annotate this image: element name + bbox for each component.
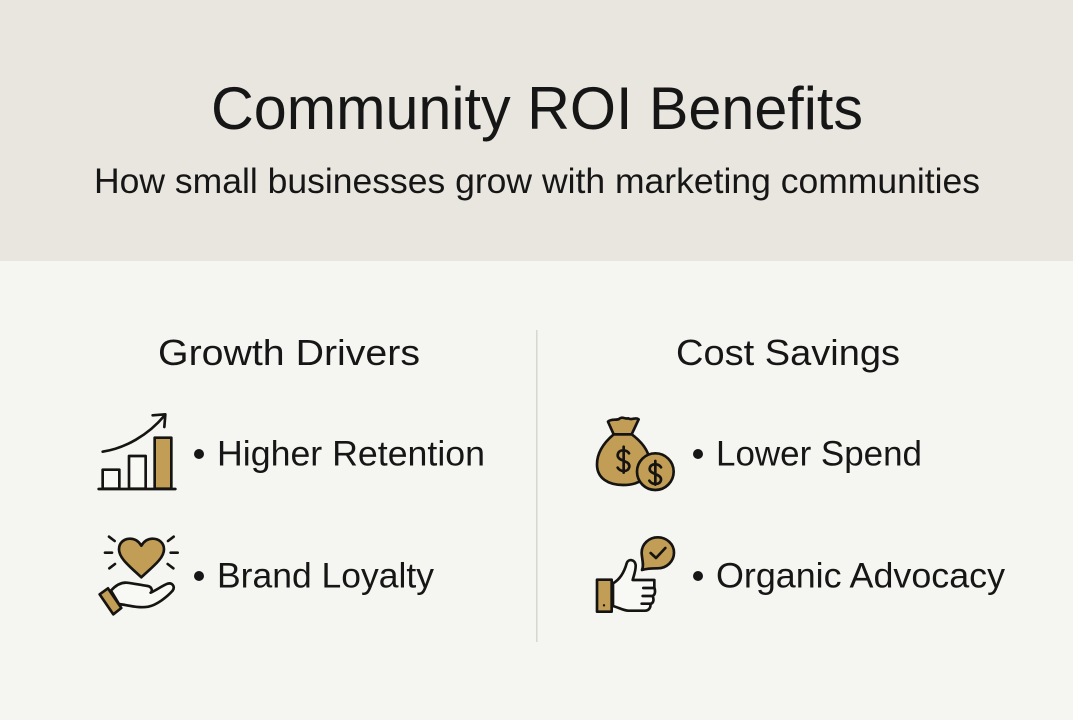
subtitle: How small businesses grow with marketing communities <box>94 162 980 201</box>
heading: growth drivers: Growth Drivers <box>158 332 420 373</box>
header band <box>0 0 1073 261</box>
item: lower spend: Lower Spend <box>716 434 922 474</box>
item: organic advocacy: Organic Advocacy <box>716 556 1006 596</box>
icon: thumbs up with check bubble <box>597 537 674 612</box>
icon: rising bar chart <box>99 414 175 489</box>
heading: cost savings: Cost Savings <box>676 332 900 373</box>
item: brand loyalty: Brand Loyalty <box>217 556 434 596</box>
icon: heart over open hand <box>100 537 178 614</box>
panel: growth drivers <box>99 332 485 614</box>
title: Community ROI Benefits <box>211 75 863 142</box>
panel: cost savings <box>597 332 1006 612</box>
icon: money bag and coin <box>597 418 674 490</box>
item: higher retention: Higher Retention <box>217 434 485 474</box>
